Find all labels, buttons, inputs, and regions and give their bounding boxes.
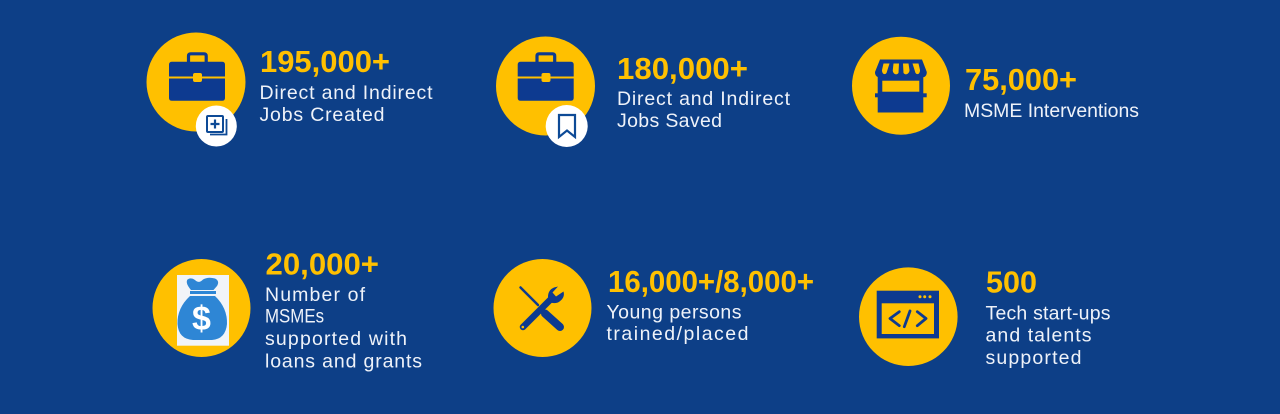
label: direct and indirect jobs created: Direct and Indirect	[260, 82, 433, 104]
label: direct and indirect jobs saved	[617, 88, 791, 132]
label: young persons trained/placed: trained/placed	[606, 323, 748, 345]
label: number of MSMEs supported with loans and grants: Number of	[265, 284, 366, 306]
panel: jobs saved	[496, 36, 791, 147]
panel: MSME interventions	[852, 37, 1139, 135]
icon: briefcase with bookmark badge	[496, 36, 595, 147]
label: young persons trained/placed: Young persons	[606, 302, 742, 324]
label: number of MSMEs supported with loans and grants: loans and grants	[265, 350, 422, 372]
label: direct and indirect jobs created: Jobs Created	[260, 104, 384, 126]
label: direct and indirect jobs created	[260, 82, 433, 126]
panel: tech start-ups	[859, 264, 1111, 369]
stat: 180,000+: 180,000+	[617, 51, 748, 86]
label: tech start-ups and talents supported: and talents	[986, 324, 1092, 346]
stat: 20,000+: 20,000+	[266, 246, 379, 282]
dollar sign: $	[192, 300, 211, 338]
stat: 75,000+: 75,000+	[965, 62, 1077, 97]
label: direct and indirect jobs saved: Jobs Saved	[617, 110, 722, 132]
icon: briefcase with add badge	[146, 32, 246, 146]
label: MSME interventions: MSME Interventions	[964, 100, 1139, 122]
label: tech start-ups and talents supported	[986, 302, 1111, 369]
panel: MSMEs supported	[152, 246, 422, 372]
label: tech start-ups and talents supported: Tech start-ups	[986, 302, 1111, 324]
label: number of MSMEs supported with loans and grants: MSMEs	[265, 306, 324, 328]
stat: 500: 500	[986, 264, 1037, 300]
panel: young persons	[494, 259, 814, 357]
icon: storefront	[852, 37, 950, 135]
icon: code window	[859, 267, 958, 366]
label: number of MSMEs supported with loans and grants	[265, 284, 422, 372]
label: tech start-ups and talents supported: supported	[986, 347, 1082, 369]
stat: 195,000+: 195,000+	[260, 44, 390, 79]
panel: jobs created	[146, 32, 433, 146]
icon: money bag	[152, 259, 250, 357]
label: number of MSMEs supported with loans and grants: supported with	[265, 328, 407, 350]
icon: crossed wrench and screwdriver	[494, 259, 592, 357]
label: young persons trained/placed	[606, 302, 748, 345]
stat: 16,000+/8,000+: 16,000+/8,000+	[608, 264, 814, 299]
label: direct and indirect jobs saved: Direct and Indirect	[617, 88, 791, 110]
